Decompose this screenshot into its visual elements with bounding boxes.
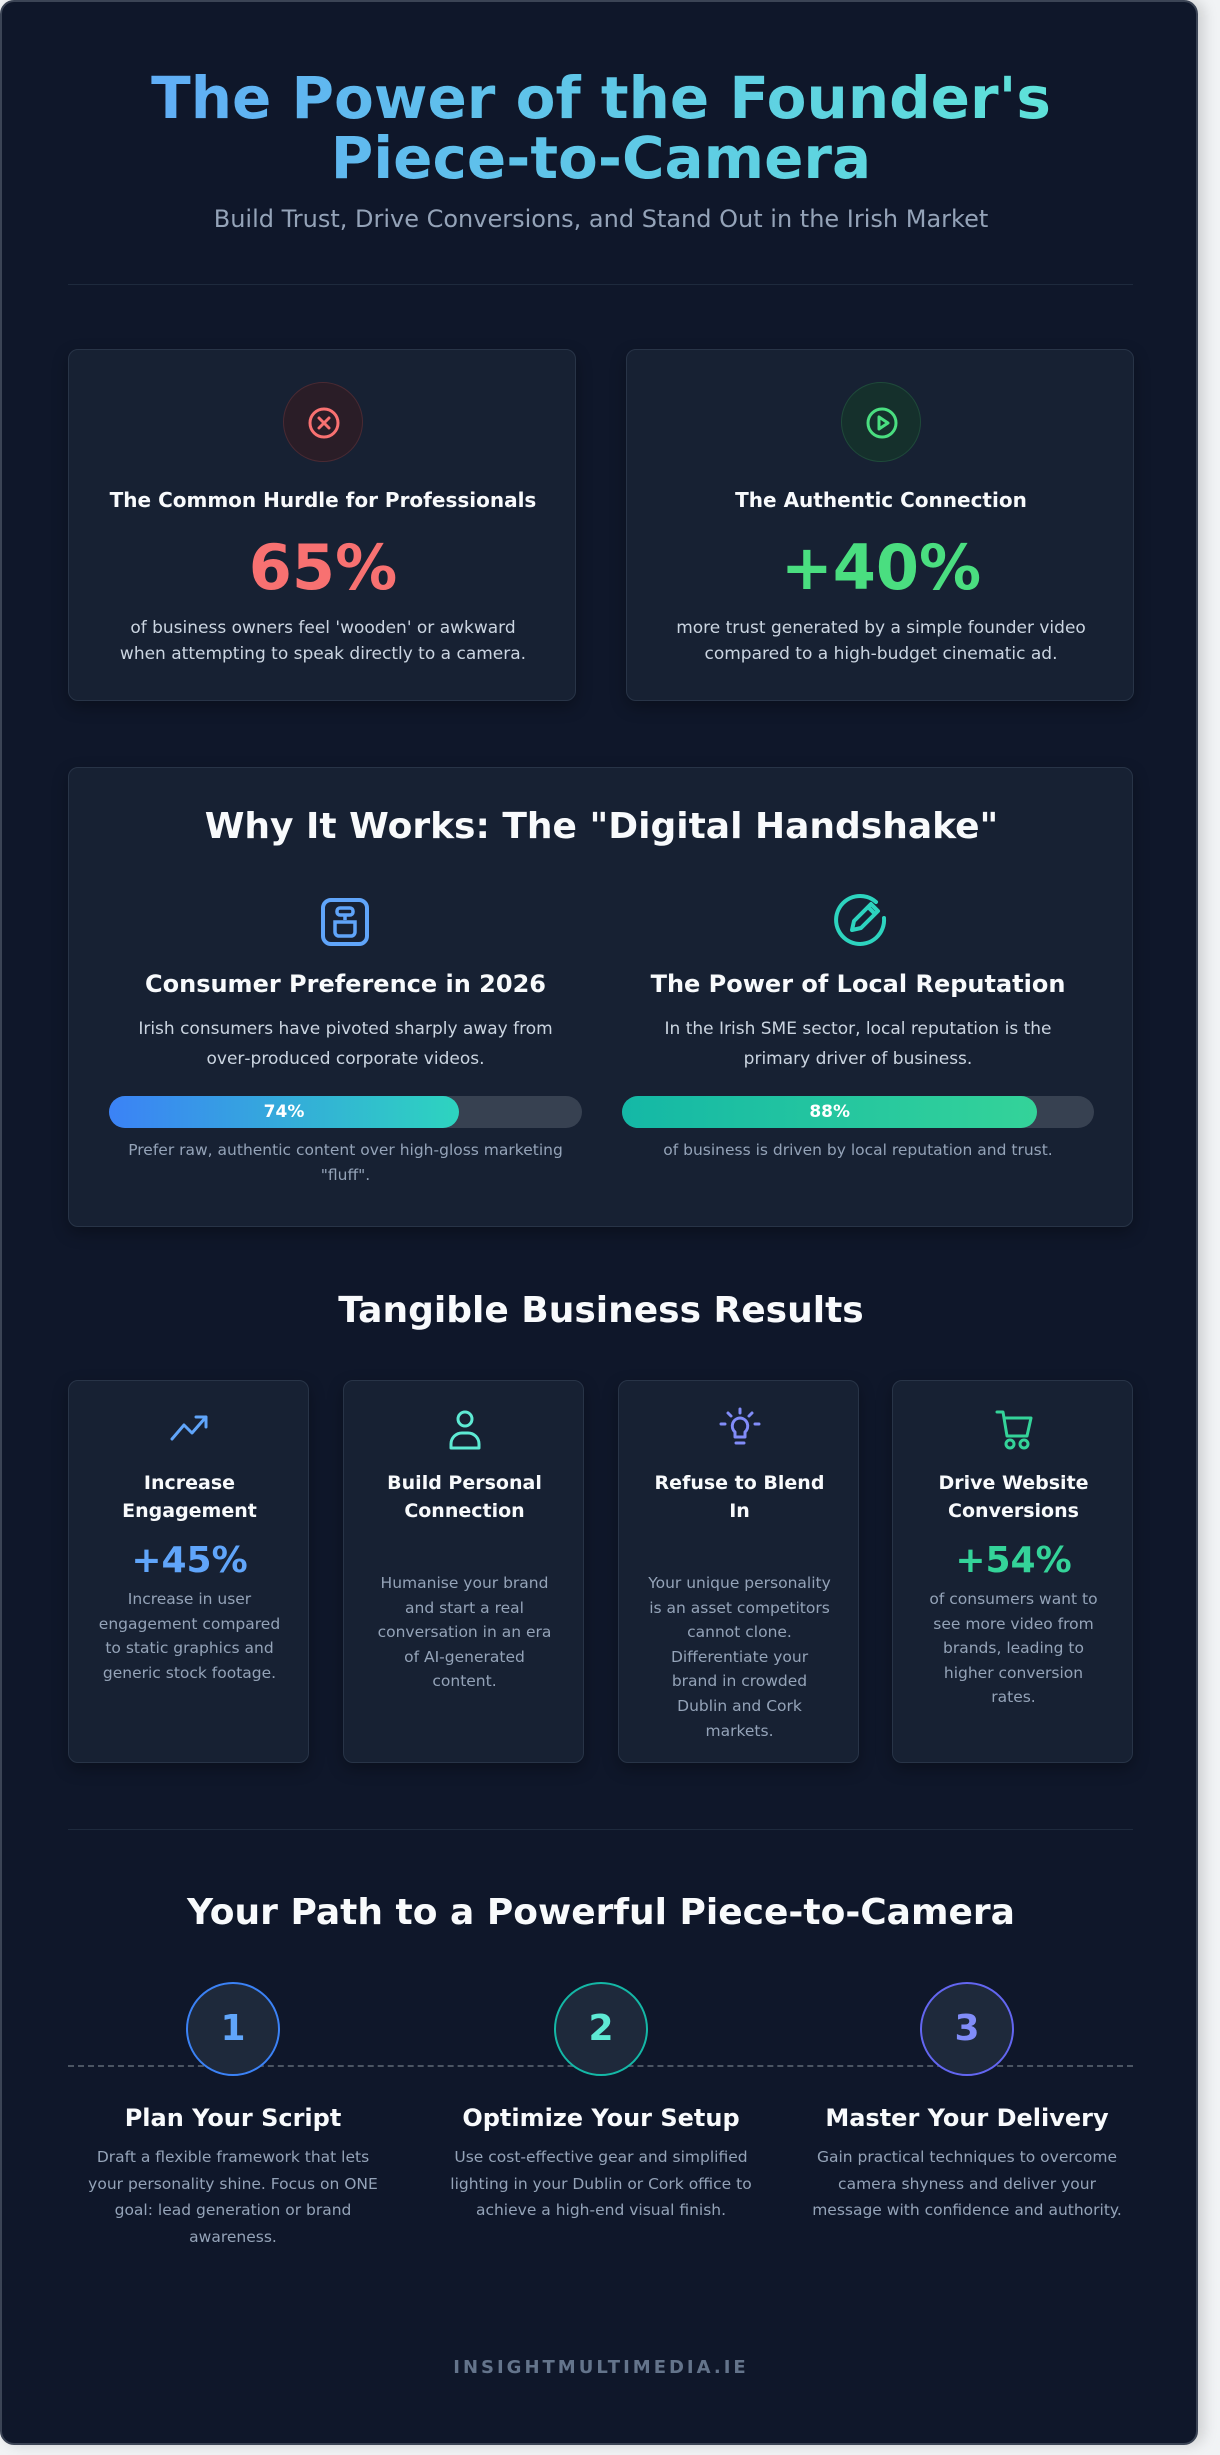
column: local reputation: [622, 894, 1094, 1159]
title: The Power of the Founder's: [151, 64, 1051, 132]
circle 2: [554, 1982, 648, 2076]
title: Build Personal: [387, 1472, 542, 1494]
stat: 65%: [249, 531, 397, 604]
title: [122, 1472, 257, 1522]
subtitle: Build Trust, Drive Conversions, and Stand Out in the Irish Market: [214, 205, 988, 233]
card: website conversions: [892, 1380, 1133, 1763]
progress bar 88%: 88%: [809, 1102, 850, 1122]
column: consumer preference: [109, 898, 582, 1184]
caption: of business is driven by local reputation and trust.: [663, 1141, 1053, 1159]
heading: tangible results: Tangible Business Results: [338, 1290, 864, 1331]
stat: +45%: [131, 1540, 248, 1581]
heading: path: Your Path to a Powerful Piece-to-Camera: [187, 1892, 1015, 1933]
step 3: [812, 1982, 1122, 2219]
title: In: [729, 1500, 750, 1522]
step text: Use cost-effective gear and simplified lighting in your Dublin or Cork office to achieve a high-end visual finish.: [450, 2148, 752, 2219]
description: more trust generated by a simple founder video compared to a high-budget cinematic ad.: [676, 618, 1086, 664]
stat: +54%: [955, 1540, 1072, 1581]
step text: Draft a flexible framework that lets your personality shine. Focus on ONE goal: lead generation or brand awareness.: [88, 2148, 378, 2246]
title: Conversions: [948, 1500, 1079, 1522]
step text: Gain practical techniques to overcome camera shyness and deliver your message with confidence and authority.: [812, 2148, 1122, 2219]
title: [655, 1472, 824, 1522]
title: Engagement: [122, 1500, 257, 1522]
panel: authentic connection: [626, 349, 1134, 701]
icon: person: [450, 1410, 480, 1450]
description: [648, 1574, 831, 1740]
icon: cart: [996, 1410, 1032, 1450]
step title: Optimize Your Setup: [462, 2104, 740, 2132]
description: Your unique personality: [648, 1574, 831, 1592]
footer: INSIGHTMULTIMEDIA.IE: [453, 2357, 749, 2378]
title: Piece-to-Camera: [331, 124, 871, 192]
description: Irish consumers have pivoted sharply away from over‑produced corporate videos.: [138, 1019, 553, 1069]
heading: The Common Hurdle for Professionals: [110, 488, 536, 512]
progress bar 74%: [109, 1096, 582, 1128]
description: brand in crowded: [672, 1672, 807, 1690]
title: Drive Website: [938, 1472, 1089, 1494]
step 2: [450, 1982, 752, 2219]
description: Increase in user engagement compared to static graphics and generic stock footage.: [99, 1590, 280, 1682]
icon: trend: [170, 1415, 208, 1441]
title: Connection: [404, 1500, 525, 1522]
step title: Plan Your Script: [125, 2104, 341, 2132]
subheading: Consumer Preference in 2026: [145, 970, 546, 998]
dashed timeline: [68, 2065, 1133, 2067]
subheading: The Power of Local Reputation: [651, 970, 1065, 998]
card: increase engagement: [68, 1380, 309, 1763]
circle 1: 1: [220, 2008, 246, 2049]
description: markets.: [705, 1722, 774, 1740]
description: Humanise your brand and start a real conversation in an era of AI-generated content.: [378, 1574, 551, 1690]
step title: Master Your Delivery: [825, 2104, 1109, 2132]
heading: Why It Works: The "Digital Handshake": [205, 806, 998, 847]
circle 1: [186, 1982, 280, 2076]
panel: common hurdle: [68, 349, 576, 701]
icon: lightbulb: [720, 1408, 760, 1444]
panel: digital handshake: [68, 767, 1133, 1227]
icon: x circle: [283, 382, 363, 462]
icon: device: [321, 898, 369, 946]
caption: Prefer raw, authentic content over high-gloss marketing "fluff".: [128, 1141, 563, 1184]
circle 2: 2: [588, 2008, 614, 2049]
icon: edit circle: [834, 894, 886, 946]
icon: play circle: [841, 382, 921, 462]
step 1: [88, 1982, 378, 2246]
description: In the Irish SME sector, local reputation is the primary driver of business.: [664, 1019, 1051, 1069]
stat: +40%: [781, 531, 981, 604]
circle 3: [920, 1982, 1014, 2076]
card: personal connection: [343, 1380, 584, 1763]
description: of business owners feel 'wooden' or awkward when attempting to speak directly to a camera.: [120, 618, 526, 664]
progress bar 74%: 74%: [264, 1102, 304, 1122]
title: [938, 1472, 1089, 1522]
title: [2, 68, 1200, 188]
title: [387, 1472, 542, 1522]
heading: The Authentic Connection: [735, 488, 1027, 512]
description: Differentiate your: [671, 1648, 808, 1666]
description: cannot clone.: [687, 1623, 792, 1641]
circle 3: 3: [954, 2008, 980, 2049]
description: of consumers want to see more video from brands, leading to higher conversion rates.: [929, 1590, 1098, 1706]
card: refuse to blend in: [618, 1380, 859, 1763]
progress bar 88%: [622, 1096, 1094, 1128]
description: Dublin and Cork: [677, 1697, 802, 1715]
title: Refuse to Blend: [655, 1472, 824, 1494]
description: is an asset competitors: [649, 1599, 830, 1617]
title: Increase: [144, 1472, 235, 1494]
